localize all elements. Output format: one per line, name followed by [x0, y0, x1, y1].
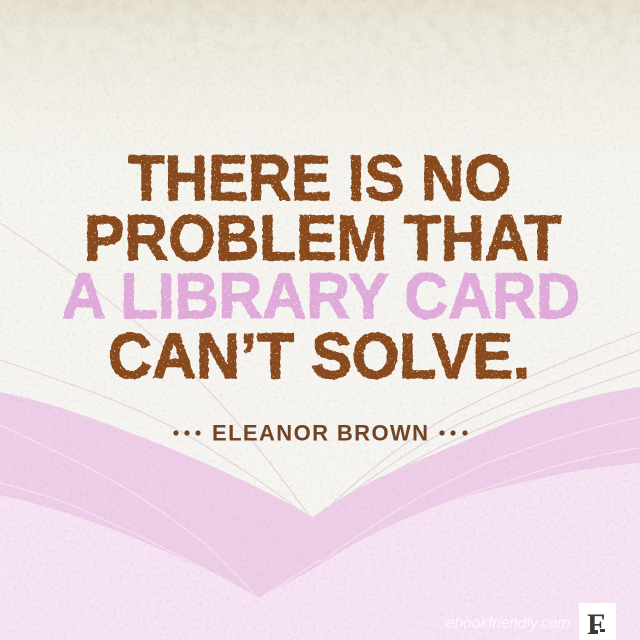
- line 3, highlighted: A LIBRARY CARD: [62, 260, 580, 332]
- line 2: PROBLEM THAT: [84, 202, 561, 274]
- author name: ELEANOR BROWN: [212, 420, 428, 446]
- quote: [62, 142, 580, 392]
- open book: light lower page area: [0, 463, 640, 640]
- open book: darker pink page band: [0, 387, 640, 598]
- aged blotches at top of paper: [30, 0, 637, 32]
- pale page lines on pink band: [0, 417, 640, 598]
- thin page lines on paper: [0, 223, 640, 514]
- line 4: CAN’T SOLVE.: [108, 320, 530, 392]
- attribution: [173, 420, 468, 446]
- line 1: THERE IS NO: [128, 142, 511, 214]
- logo: [579, 603, 616, 640]
- left dots: [173, 430, 201, 436]
- site url: ebookfriendly.com: [446, 615, 570, 632]
- right dots: [439, 430, 468, 436]
